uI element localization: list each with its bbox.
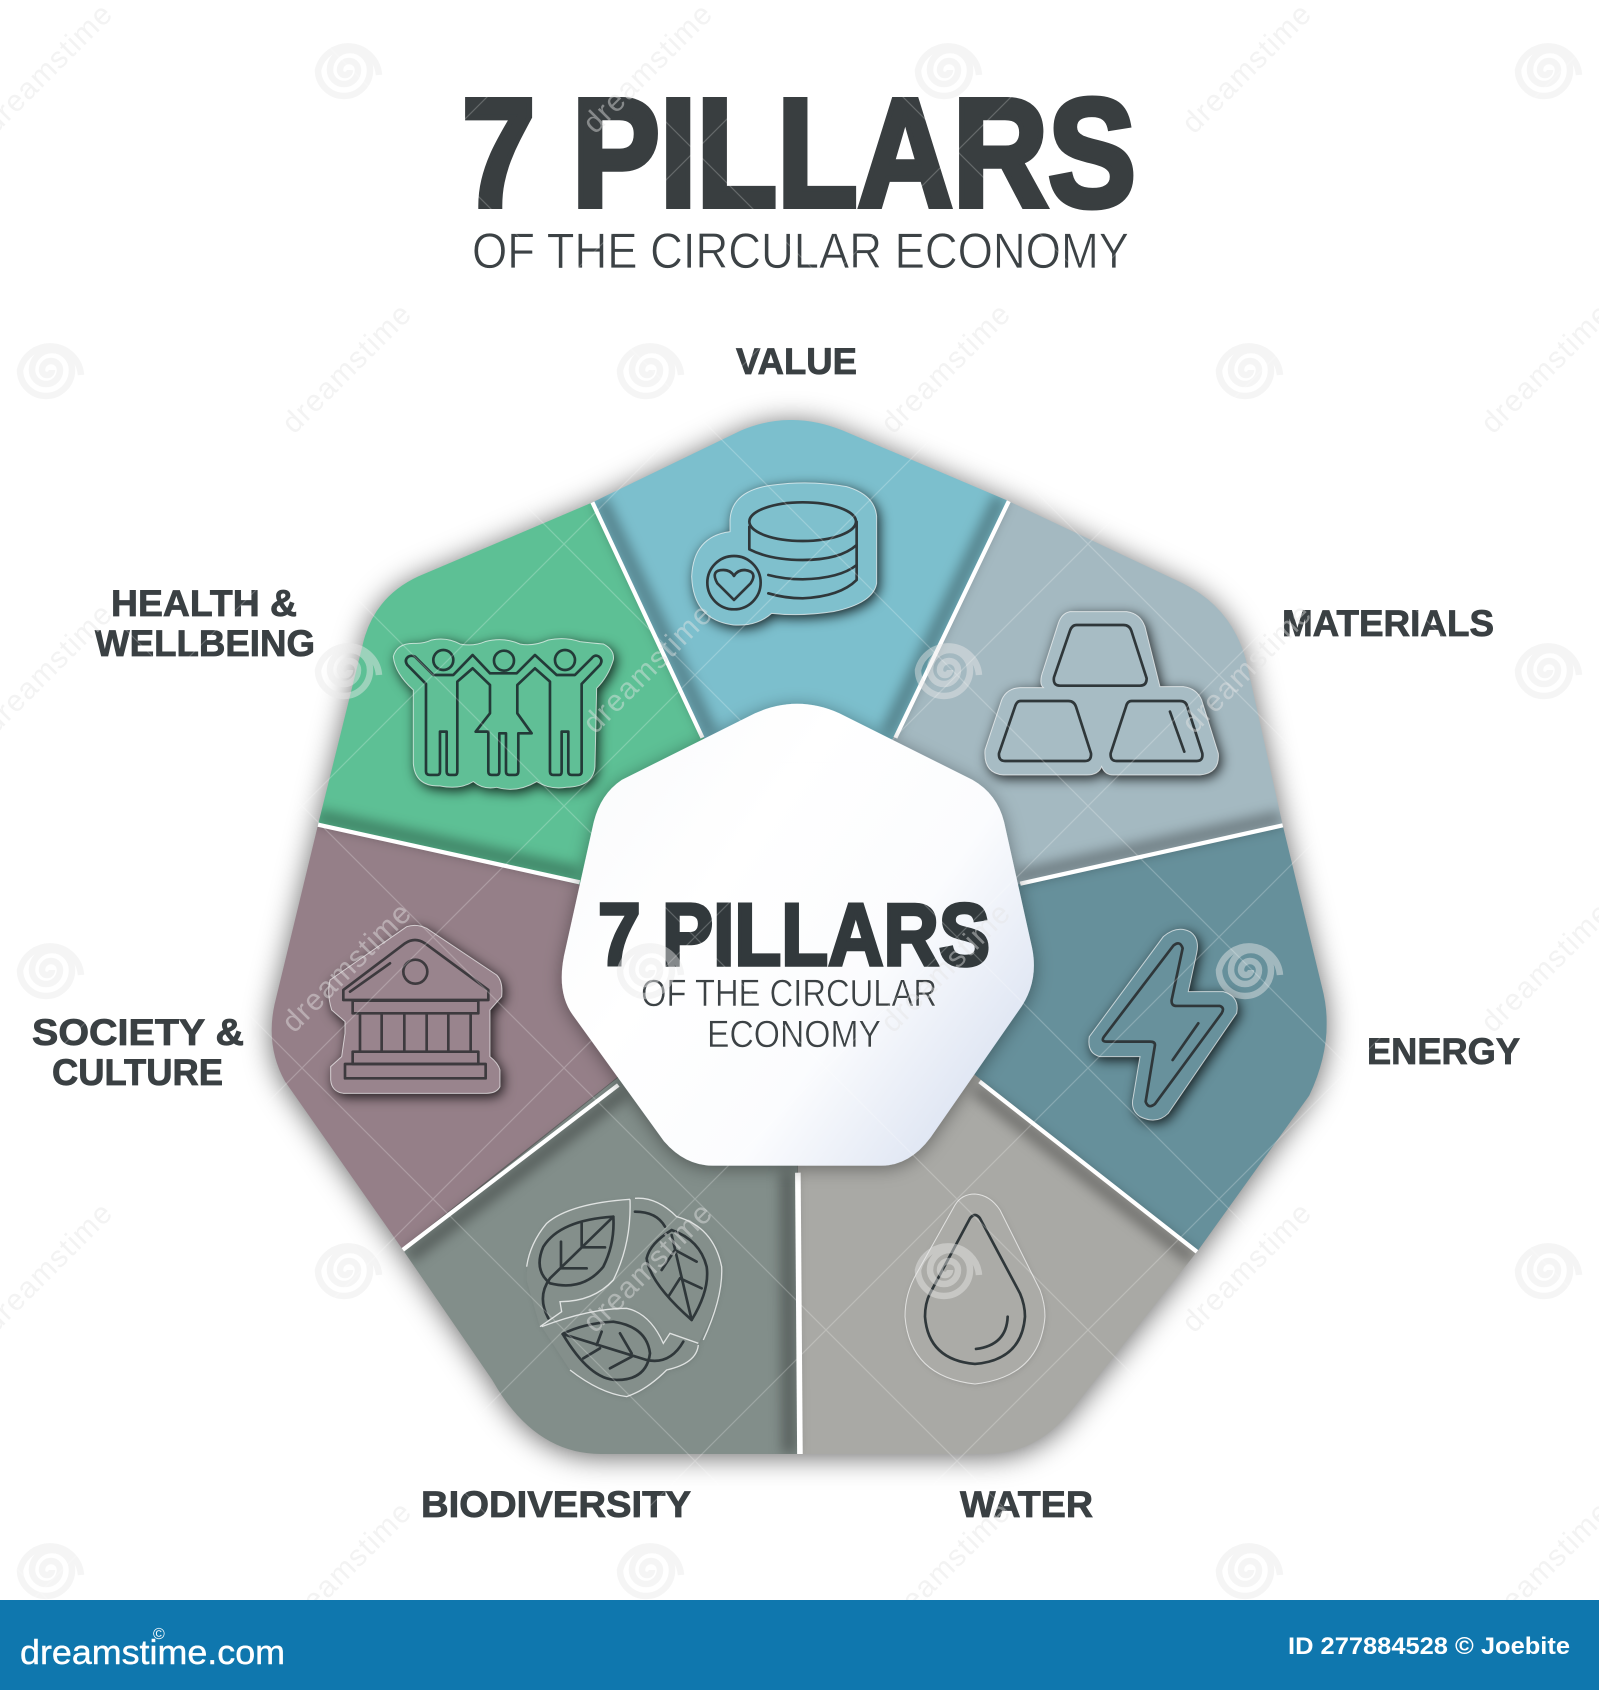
label: health and wellbeing: WELLBEING: [95, 623, 315, 664]
watermark text: dreamstime: [577, 598, 719, 740]
label: health and wellbeing: [95, 583, 315, 664]
watermark text: dreamstime: [1176, 1197, 1318, 1339]
label: health and wellbeing: HEALTH &: [111, 583, 297, 624]
subtitle: OF THE CIRCULAR ECONOMY: [472, 223, 1129, 279]
segment: biodiversity: [403, 1078, 798, 1454]
label: energy: ENERGY: [1367, 1031, 1520, 1072]
segment: energy: [974, 825, 1327, 1251]
title: 7 PILLARS: [462, 67, 1136, 239]
center text: OF THE CIRCULAR: [641, 973, 937, 1015]
label: society and culture: [32, 1012, 244, 1093]
segment: value: [592, 420, 1008, 740]
center text: [598, 885, 990, 1056]
segment: water: [798, 1074, 1193, 1452]
heptagon diagram: [250, 380, 1372, 1502]
watermark text: dreamstime: [875, 1496, 1017, 1638]
watermark text: dreamstime: [577, 1197, 719, 1339]
label: materials: MATERIALS: [1282, 603, 1494, 644]
center text: ECONOMY: [707, 1014, 881, 1056]
footer logo: ©: [153, 1626, 165, 1643]
watermark text: dreamstime: [276, 298, 418, 440]
watermark text: dreamstime: [1176, 598, 1318, 740]
segment: society: [272, 826, 618, 1248]
footer logo: dreamstime.com: [20, 1634, 285, 1672]
watermark text: dreamstime: [1176, 0, 1318, 140]
segment: health: [318, 502, 704, 884]
icon: coins with heart: [692, 483, 877, 625]
label: water: WATER: [960, 1484, 1093, 1525]
watermark text: dreamstime: [577, 0, 719, 140]
footer image id: ID 277884528 © Joebite: [1288, 1633, 1570, 1660]
watermark text: dreamstime: [276, 1496, 418, 1638]
icon: museum building: [329, 925, 502, 1093]
icon: leaves in a cycle: [527, 1198, 722, 1397]
pillar labels: [32, 341, 1520, 1525]
segment: materials: [892, 502, 1282, 884]
label: value: VALUE: [736, 341, 857, 382]
icon: gold bars: [985, 612, 1218, 775]
icon: three people: [393, 639, 614, 789]
footer bar: [0, 1600, 1599, 1690]
icon: lightning bolt: [1089, 929, 1237, 1120]
watermark text: dreamstime: [875, 298, 1017, 440]
icon: water drop: [905, 1194, 1045, 1384]
watermark text: dreamstime: [875, 897, 1017, 1039]
center heptagon: [562, 704, 1034, 1166]
label: society and culture: SOCIETY &: [32, 1012, 244, 1053]
label: biodiversity: BIODIVERSITY: [421, 1484, 691, 1525]
label: society and culture: CULTURE: [52, 1052, 223, 1093]
watermark text: dreamstime: [276, 897, 418, 1039]
center text: 7 PILLARS: [598, 885, 990, 984]
